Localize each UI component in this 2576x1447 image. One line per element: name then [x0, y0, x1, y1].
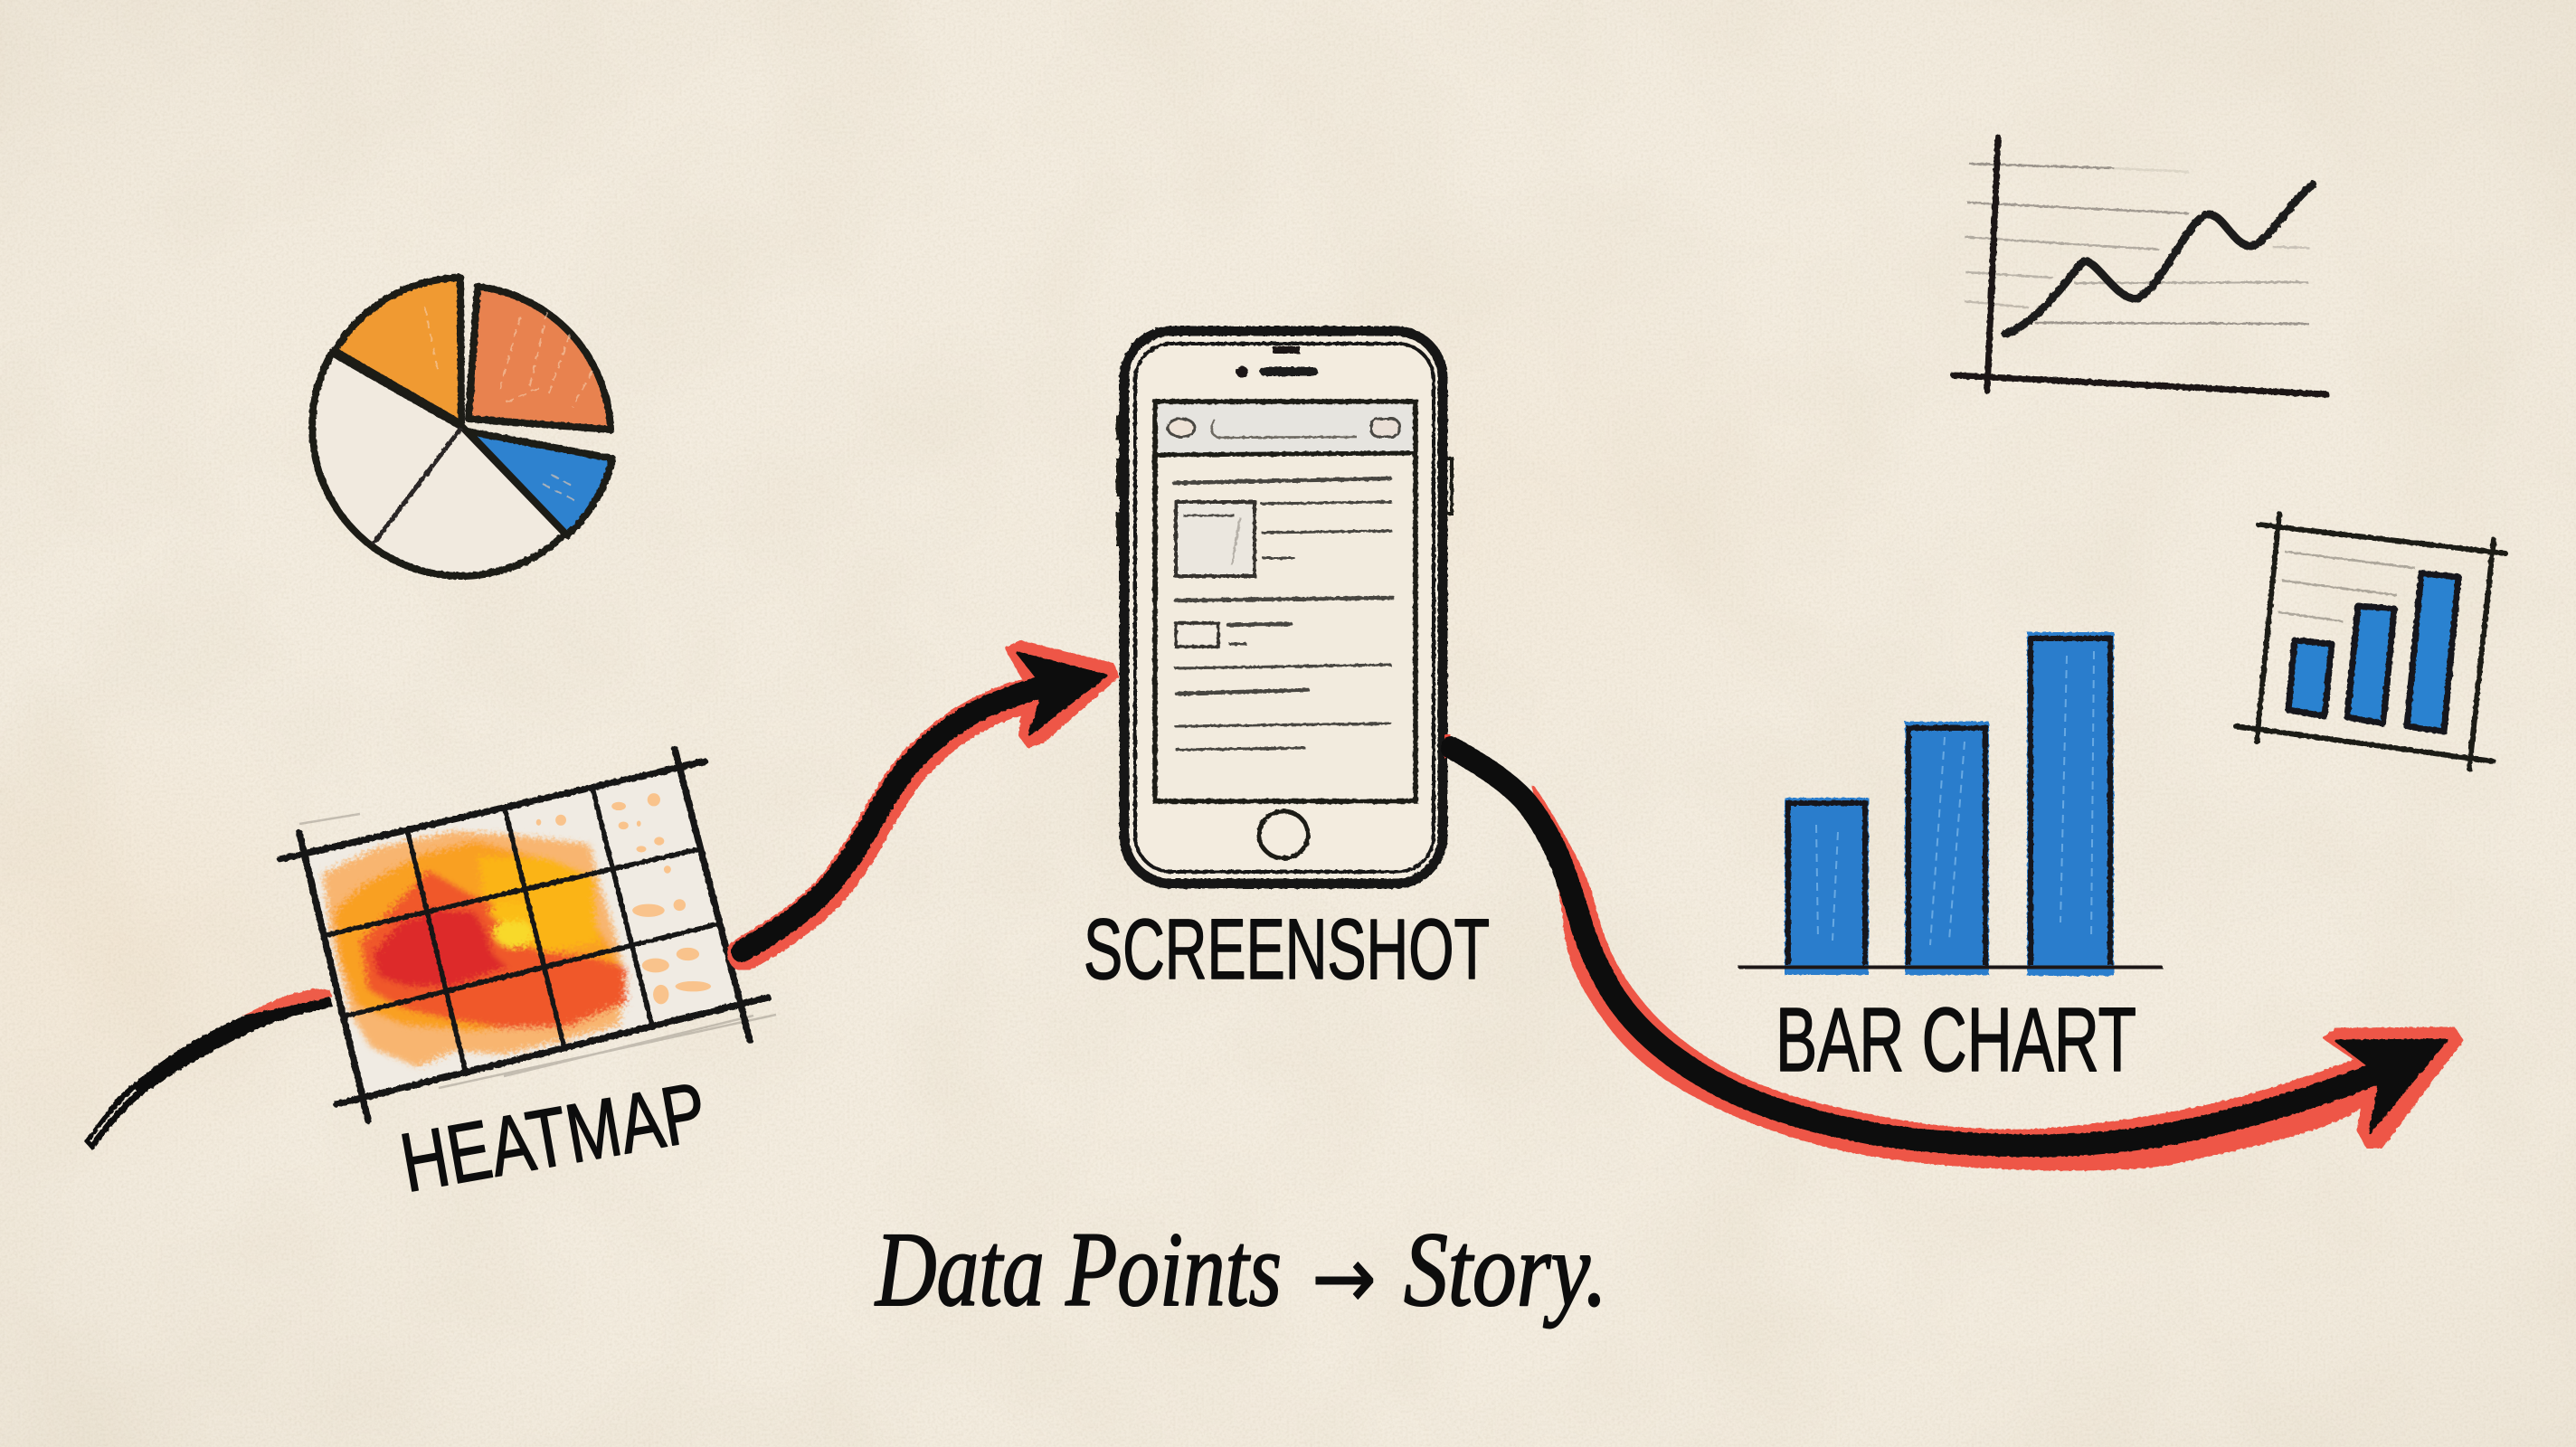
heatmap: scattered dots — [536, 793, 711, 1004]
label: HEATMAP: HEATMAP — [394, 1065, 713, 1210]
phone: side buttons — [1118, 417, 1452, 544]
tail: black stroke — [84, 992, 333, 1150]
big bars: black outlines — [1788, 638, 2110, 965]
big bars: baseline — [1741, 966, 2160, 969]
small bar chart — [2236, 514, 2505, 769]
line chart: gridlines — [1965, 164, 2309, 324]
line chart — [1954, 137, 2326, 394]
phone: small thumbnail — [1176, 623, 1218, 647]
tail: red edge — [242, 988, 332, 1016]
heatmap: cells and colour blobs — [307, 767, 742, 1096]
heatmap — [280, 749, 776, 1121]
big bars: streaks — [1816, 651, 2094, 945]
phone: body — [1124, 331, 1443, 884]
small bar chart: frame — [2236, 514, 2505, 769]
phone: text lines — [1174, 478, 1393, 750]
arrow 1: red under-stroke — [744, 642, 1117, 954]
phone: screen — [1155, 402, 1416, 801]
small bar chart: bars — [2288, 573, 2458, 732]
heatmap: grid lines — [280, 749, 768, 1121]
small bar chart: gridlines — [2278, 552, 2415, 621]
pie: white slices and outer ring — [312, 353, 565, 576]
left tail stroke entering heatmap — [84, 988, 333, 1150]
pie chart — [312, 278, 612, 576]
phone — [1118, 331, 1452, 884]
tail: split bristle — [90, 1090, 136, 1141]
big arrow: red tip at phone edge — [1444, 734, 1451, 758]
arrow 1: black stroke and head — [742, 653, 1106, 951]
big arrow: red under-stroke and head — [1533, 787, 2462, 1169]
heatmap: pencil shadow lines — [299, 814, 776, 1088]
big bar chart — [1741, 632, 2160, 976]
tagline — [874, 1210, 1607, 1329]
pie: hatch marks — [425, 307, 592, 500]
phone: image placeholder — [1176, 502, 1255, 576]
big arrow from phone to the right — [1447, 734, 2462, 1169]
line chart: axes — [1954, 137, 2326, 394]
phone: browser bar — [1156, 404, 1415, 455]
label: SCREENSHOT: SCREENSHOT — [1084, 902, 1490, 998]
pie: orange slice — [335, 278, 461, 424]
arrow from heatmap to phone — [742, 642, 1117, 954]
pie: coral slice — [469, 287, 611, 430]
tagline: Story. — [1404, 1210, 1607, 1329]
phone: home button — [1259, 811, 1308, 858]
phone: camera and speaker — [1236, 346, 1318, 378]
pie: blue slice — [468, 431, 612, 535]
label: BAR CHART: BAR CHART — [1776, 989, 2136, 1091]
line chart: curve — [2005, 184, 2313, 334]
tagline: → — [1312, 1227, 1377, 1329]
big bars: blue fills — [1785, 632, 2114, 976]
pie: spoke — [373, 428, 461, 544]
tagline: Data Points — [874, 1210, 1282, 1329]
big arrow: black stroke and head — [1452, 748, 2447, 1146]
